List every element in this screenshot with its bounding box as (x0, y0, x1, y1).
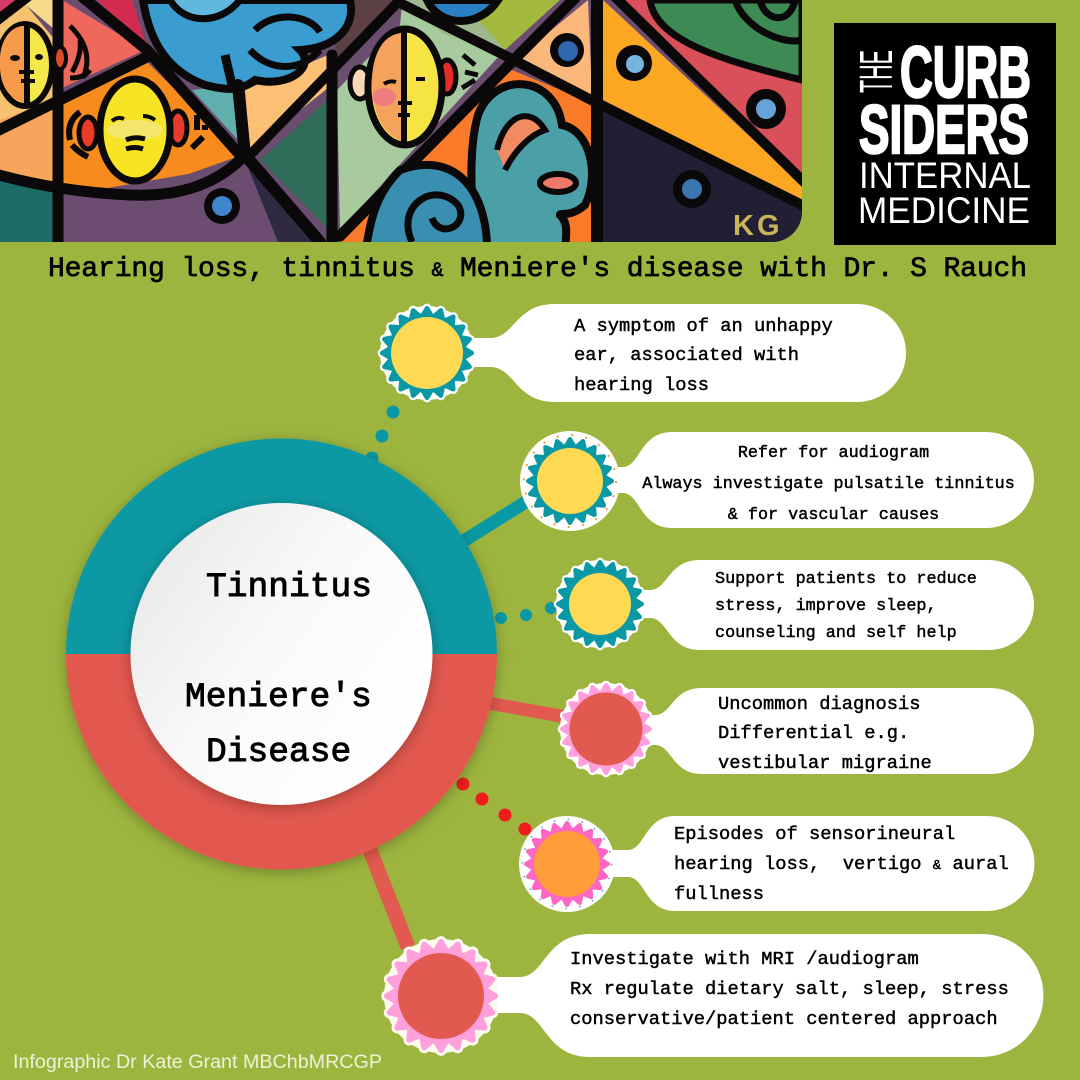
logo: The Curbsiders Internal Medicine: THE (850, 50, 902, 93)
title: Hearing loss, tinnitus & Meniere's disease with Dr. S Rauch (48, 254, 1027, 285)
text: hearing loss (574, 374, 709, 396)
text: Support patients to reduce (715, 570, 977, 589)
logo: The Curbsiders Internal Medicine (834, 23, 1056, 245)
label: Meniere's Disease (185, 678, 372, 772)
logo: The Curbsiders Internal Medicine: INTERNAL (859, 155, 1031, 196)
text: ear, associated with (574, 344, 799, 366)
callout 4: uncommon diagnosis (560, 683, 1034, 775)
connector: coral line to badge 4 (488, 703, 572, 718)
text: counseling and self help (715, 624, 957, 643)
text: Refer for audiogram (738, 444, 929, 463)
text: Uncommon diagnosis (718, 693, 921, 715)
painted face: left (0, 24, 90, 106)
painted blue swirl top (143, 0, 351, 89)
icon: orange sun badge (519, 816, 615, 912)
footer credit: Infographic Dr Kate Grant MBChbMRCGP (13, 1052, 382, 1073)
text: A symptom of an unhappy (574, 315, 833, 337)
icon: teal sun badge (556, 560, 644, 648)
text: hearing loss, vertigo & aural (674, 853, 1009, 875)
painted dots (204, 33, 786, 224)
text: & for vascular causes (728, 506, 939, 525)
painted green swirl (650, 0, 802, 80)
text (715, 570, 977, 643)
callout 2: audiogram (520, 431, 1034, 531)
label: Tinnitus: Tinnitus (206, 568, 372, 607)
text (642, 444, 1015, 525)
text: Always investigate pulsatile tinnitus (642, 475, 1015, 494)
text: fullness (674, 883, 764, 905)
painting: abstract faces and ears (0, 0, 804, 260)
logo: The Curbsiders Internal Medicine: MEDICINE (858, 190, 1030, 231)
text: Episodes of sensorineural (674, 823, 955, 845)
connector: coral line to badge 6 (370, 850, 408, 947)
painted teal swirls (471, 84, 592, 260)
callout 5: episodes (519, 816, 1034, 912)
connector: teal dots to badge 3 (495, 602, 557, 624)
connector: teal dots to badge 1 (366, 406, 400, 464)
text (674, 823, 1009, 905)
icon: teal sun badge (380, 306, 474, 400)
callout 3: support (556, 560, 1034, 650)
text (574, 315, 833, 396)
text (570, 948, 1009, 1030)
text: Differential e.g. (718, 722, 909, 744)
central ring diagram (66, 438, 497, 869)
text: vestibular migraine (718, 752, 932, 774)
connector: red dots to badge 5 (456, 778, 532, 836)
text: Rx regulate dietary salt, sleep, stress (570, 978, 1009, 1000)
painted face: split (350, 29, 478, 145)
text (718, 693, 932, 774)
painted signature: KG (733, 210, 782, 242)
icon: large pink sun badge (384, 939, 498, 1053)
text: Investigate with MRI /audiogram (570, 948, 919, 970)
painted black lines (0, 0, 804, 247)
callout 1: symptom (380, 304, 906, 402)
painted face: yellow (69, 79, 205, 181)
text: conservative/patient centered approach (570, 1008, 998, 1030)
connector: teal line to badge 2 (462, 498, 532, 542)
label: Meniere's Disease: Meniere's (185, 678, 372, 717)
icon: pink sun badge (560, 683, 652, 775)
callout 6: investigate (384, 934, 1043, 1057)
label: Meniere's Disease: Disease (206, 733, 351, 772)
icon: teal sun badge (520, 431, 620, 531)
inner white circle (130, 503, 432, 805)
text: stress, improve sleep, (715, 597, 937, 616)
